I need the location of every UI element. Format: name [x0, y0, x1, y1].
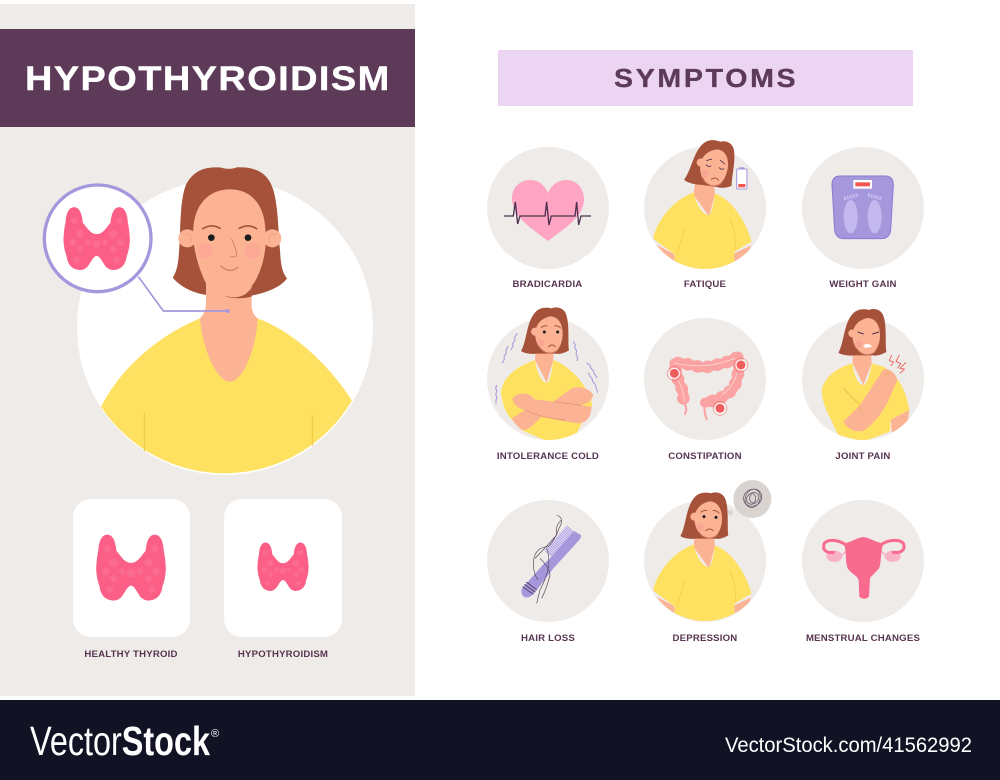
- symptom: fatigue: [644, 136, 766, 290]
- symptom: depression: DEPRESSION: [673, 633, 737, 644]
- symptom: joint pain: [802, 309, 924, 462]
- symptom: hair loss: [487, 500, 609, 644]
- card: hypothyroidism: HYPOTHYROIDISM: [238, 649, 328, 660]
- symptom: hair loss: HAIR LOSS: [521, 633, 575, 644]
- symptoms heading: [498, 50, 913, 106]
- illustration: woman with thyroid callout: [44, 167, 373, 475]
- callout circle with thyroid: [44, 185, 151, 292]
- thought bubble: [728, 480, 771, 518]
- logo text: VectorStock: [30, 718, 210, 764]
- panel: hypothyroidism overview: [0, 4, 415, 696]
- symptom: weight gain: [802, 147, 924, 290]
- registered mark: ®: [211, 728, 219, 740]
- card: healthy thyroid: [73, 499, 190, 660]
- symptom: menstrual changes: [802, 500, 924, 644]
- symptom: bradicardia: [487, 147, 609, 290]
- image id: VectorStock.com/41562992: [725, 734, 972, 757]
- symptom: intolerance cold: [487, 307, 609, 462]
- card: healthy thyroid: HEALTHY THYROID: [84, 649, 178, 660]
- symptom: depression: [644, 480, 771, 644]
- icon: low battery: [737, 167, 747, 189]
- symptom: fatigue: FATIQUE: [684, 279, 727, 290]
- title banner: HYPOTHYROIDISM: [25, 59, 391, 98]
- symptom: menstrual changes: MENSTRUAL CHANGES: [806, 633, 920, 644]
- card: hypothyroidism: [224, 499, 342, 660]
- footer band: [0, 700, 1000, 780]
- symptoms heading: SYMPTOMS: [614, 63, 798, 93]
- symptom: joint pain: JOINT PAIN: [835, 451, 891, 462]
- symptom: weight gain: WEIGHT GAIN: [829, 279, 897, 290]
- symptom: constipation: CONSTIPATION: [668, 451, 742, 462]
- symptom: bradicardia: BRADICARDIA: [513, 279, 582, 290]
- symptom: intolerance cold: INTOLERANCE COLD: [497, 451, 599, 462]
- symptom: constipation: [644, 318, 766, 462]
- title banner: [0, 29, 415, 127]
- callout line: [138, 277, 230, 313]
